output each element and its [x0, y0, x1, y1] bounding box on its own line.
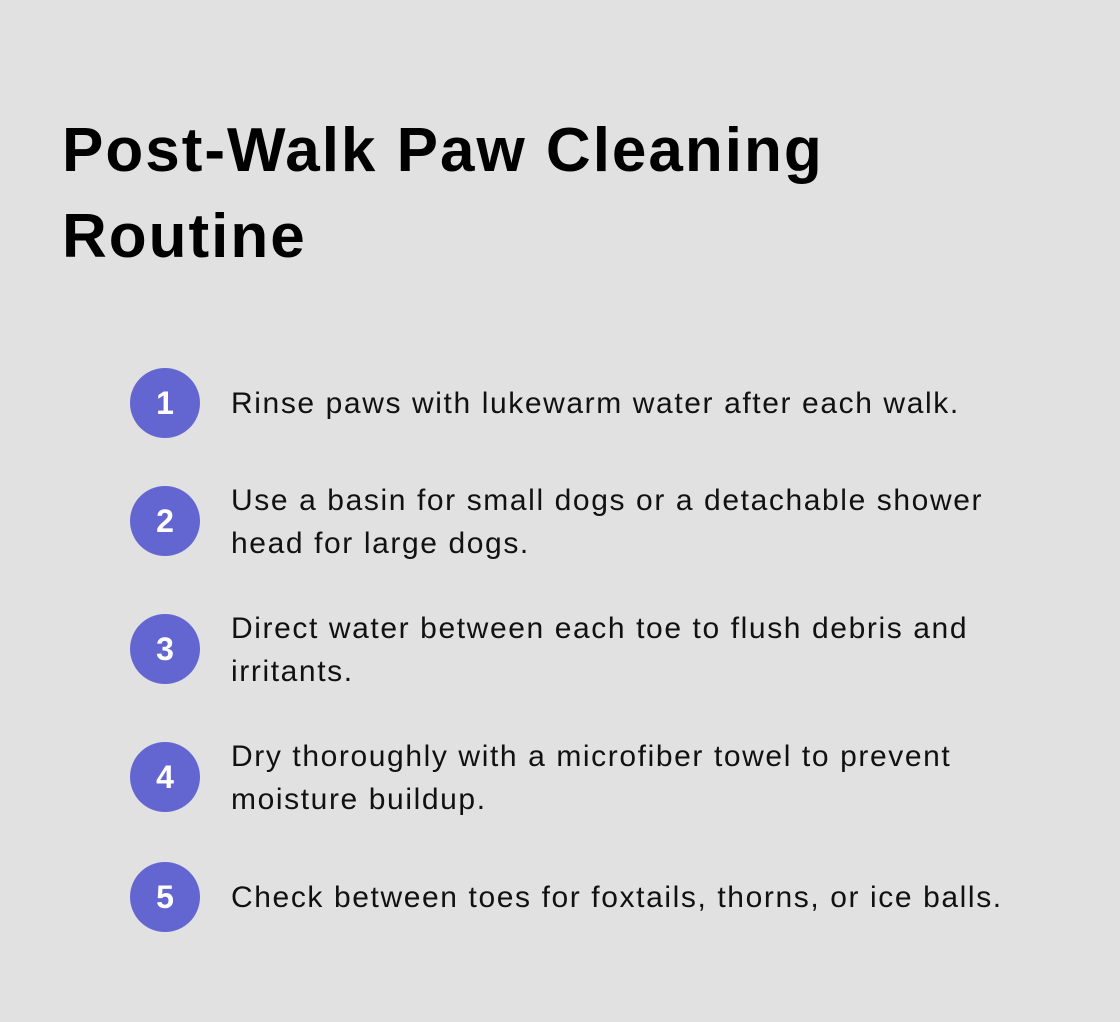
step 5: Check between toes for foxtails, thorns, or ice balls.: [231, 881, 1003, 914]
step 3: irritants.: [231, 655, 354, 688]
step 5: 5: [156, 879, 174, 915]
step 3: [130, 612, 968, 688]
step 5: [130, 862, 1003, 932]
step 2: head for large dogs.: [231, 527, 530, 560]
step 4: Dry thoroughly with a microfiber towel to prevent: [231, 740, 951, 773]
step 1: [130, 368, 960, 438]
step 2: 2: [156, 503, 174, 539]
step 1: 1: [156, 385, 174, 421]
step 4: [130, 740, 951, 816]
step 4: moisture buildup.: [231, 783, 487, 816]
title: [62, 116, 824, 271]
step 2: Use a basin for small dogs or a detachable shower: [231, 484, 983, 517]
step 2: [130, 484, 983, 560]
step 4: 4: [156, 759, 174, 795]
step 3: 3: [156, 631, 174, 667]
title: Post-Walk Paw Cleaning: [62, 116, 824, 185]
step 3: Direct water between each toe to flush debris and: [231, 612, 968, 645]
title: Routine: [62, 202, 307, 271]
step 1: Rinse paws with lukewarm water after each walk.: [231, 387, 960, 420]
